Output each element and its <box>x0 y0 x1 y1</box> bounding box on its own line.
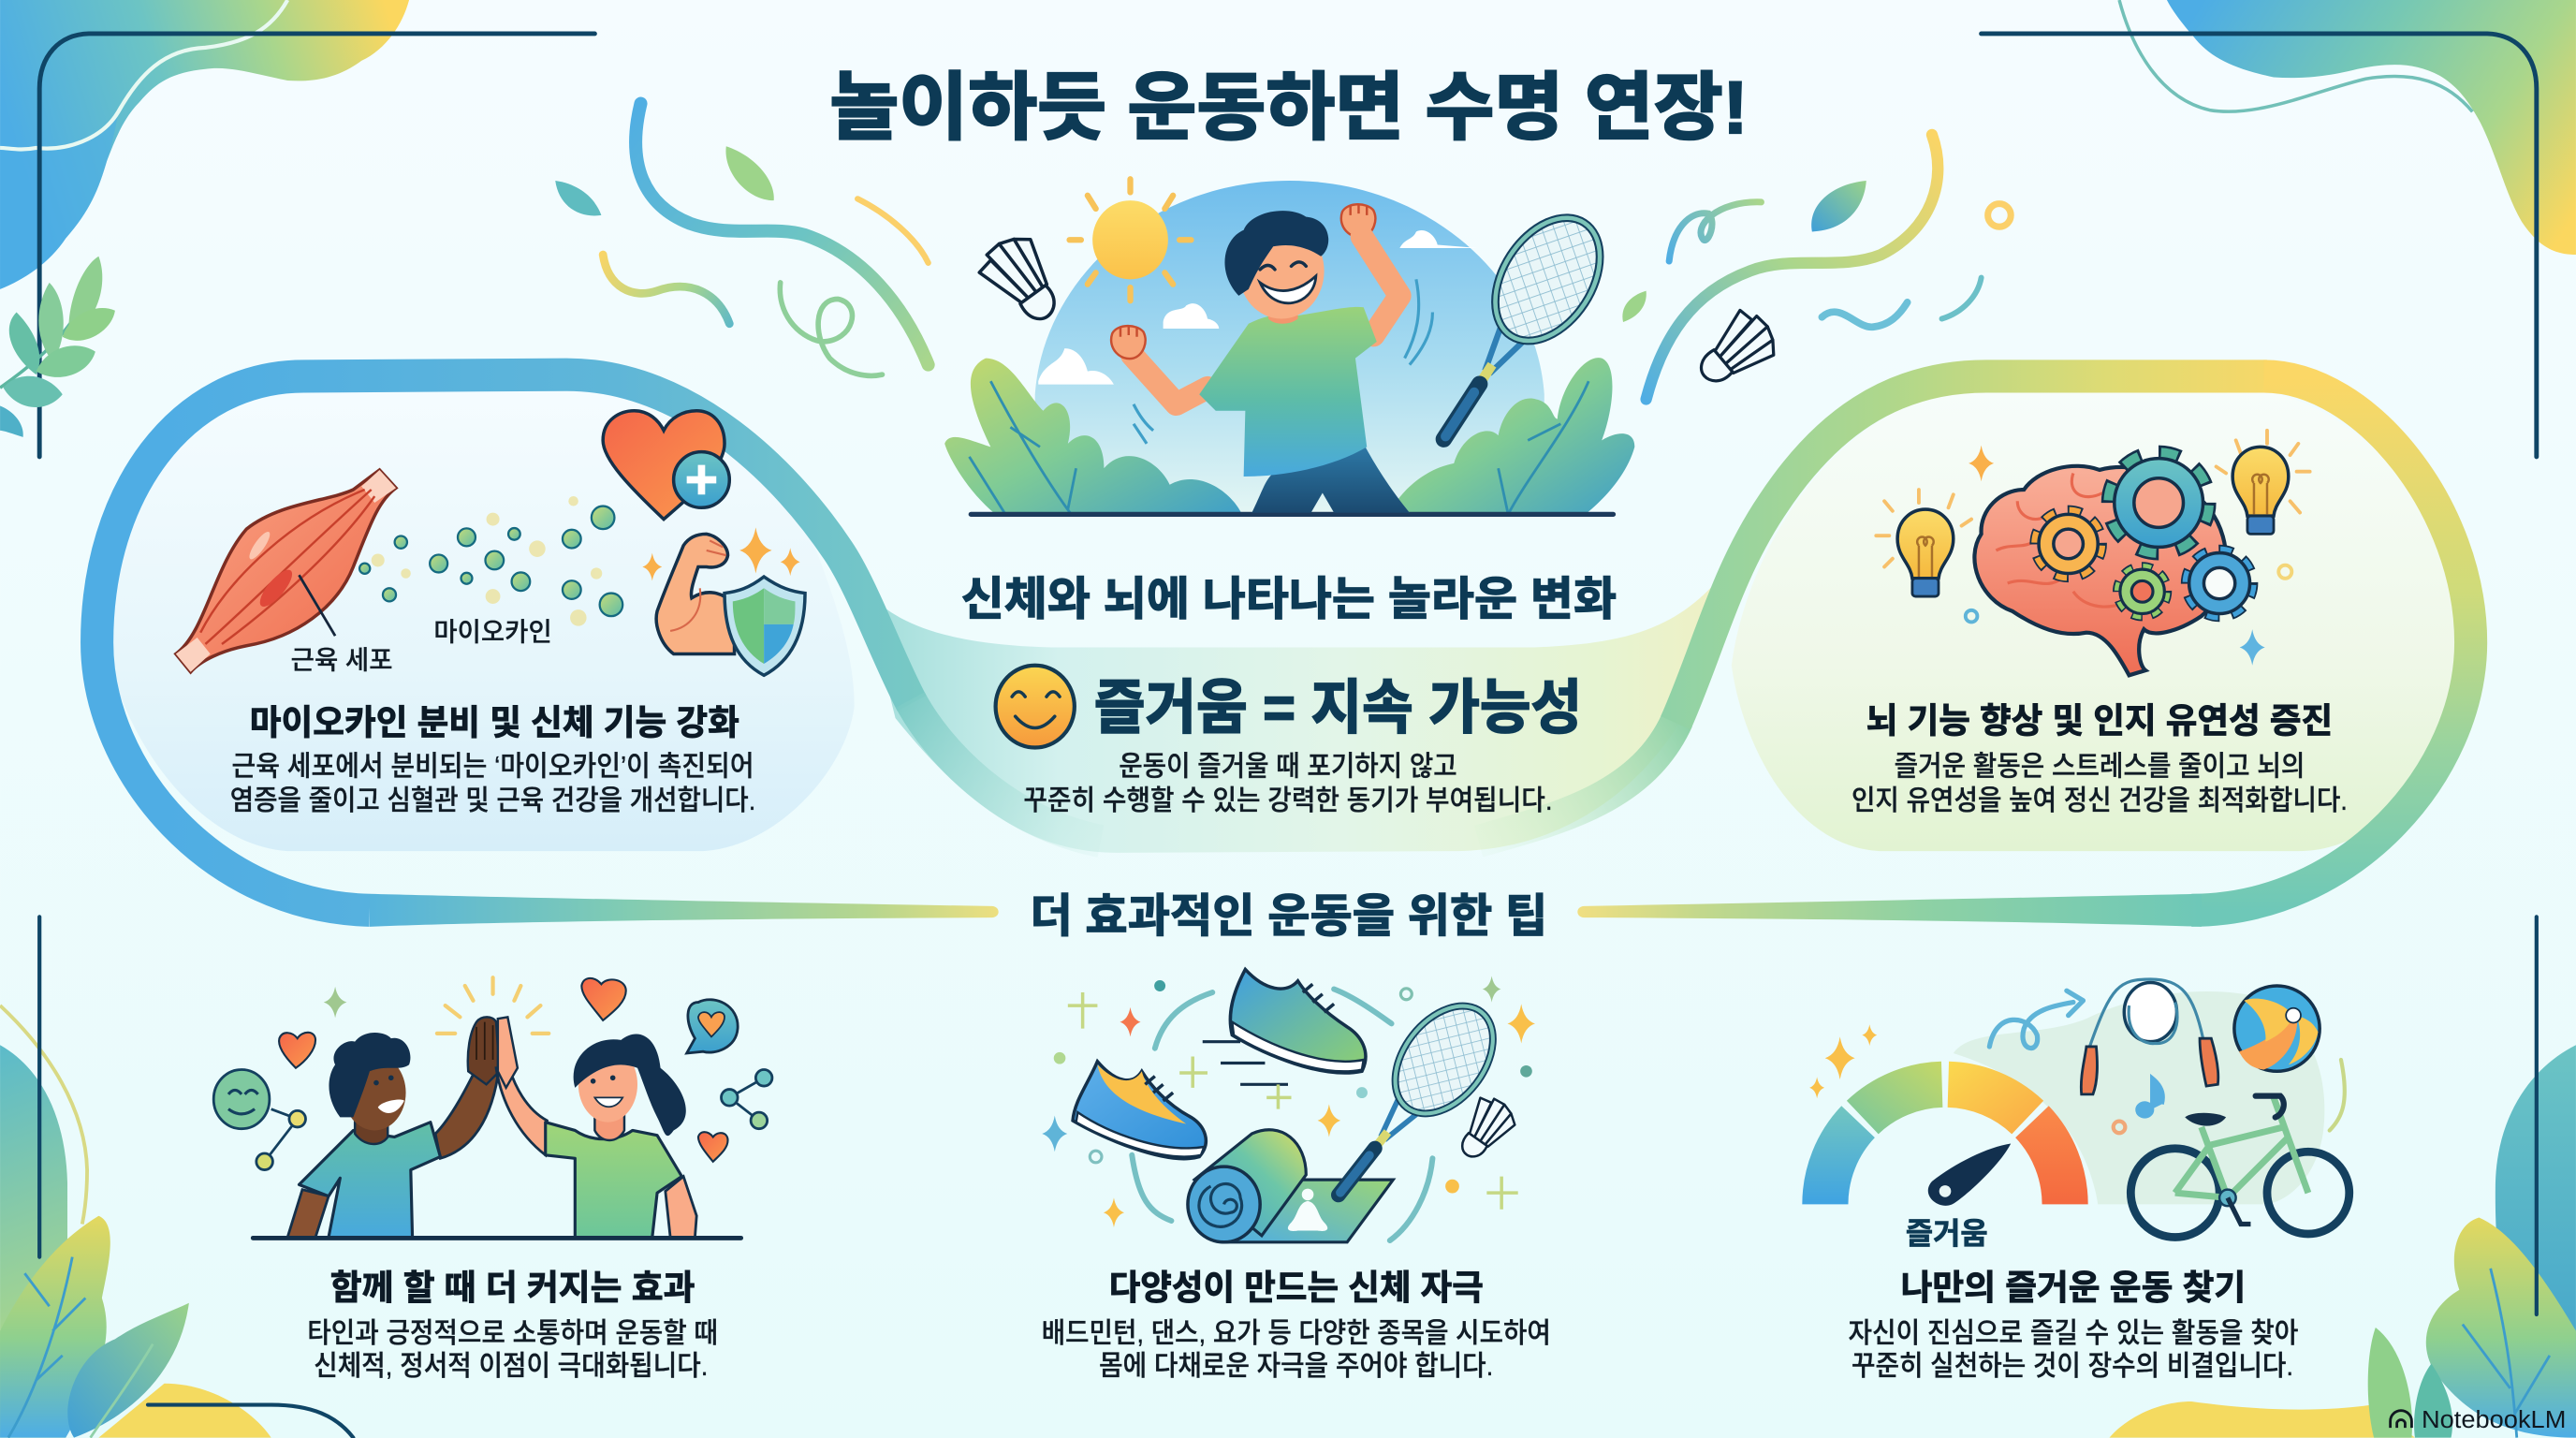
text: tip one: 타인과 긍정적으로 소통하며 운동할 때 <box>307 1318 718 1349</box>
sparkles small <box>1809 1024 2125 1133</box>
icon: racket small <box>1307 988 1513 1220</box>
bush right <box>1388 358 1634 514</box>
bottom-left corner decoration <box>0 917 353 1438</box>
person <box>1111 204 1432 513</box>
text: tip three: 나만의 즐거운 운동 찾기 <box>1901 1269 2246 1307</box>
illustration: high five <box>213 977 772 1238</box>
icon: bulb left <box>1897 509 1954 596</box>
heading: changes: 신체와 뇌에 나타나는 놀라운 변화 <box>961 574 1617 624</box>
gauge <box>1802 1062 2088 1206</box>
label: myokine: 마이오카인 <box>433 617 552 646</box>
top-right corner decoration <box>1982 0 2576 457</box>
text: tip two <box>1042 1269 1551 1382</box>
jump rope <box>2081 979 2218 1094</box>
illustration: gauge and gear <box>1802 979 2349 1251</box>
icon: shield <box>724 577 805 675</box>
top-left corner decoration <box>0 0 594 457</box>
text: right panel heading: 뇌 기능 향상 및 인지 유연성 증진 <box>1866 702 2333 741</box>
icon: leaf small <box>555 181 601 215</box>
icon: bicycle <box>2130 1096 2349 1238</box>
gear large <box>2110 453 2208 552</box>
illustration: shoes, racket, mat <box>1042 969 1535 1242</box>
icon: smiley <box>213 1070 270 1129</box>
icon: racket <box>1407 198 1621 463</box>
text: right panel description <box>1852 751 2348 816</box>
bush left <box>944 359 1242 514</box>
gear orange <box>2036 511 2101 577</box>
ribbon right <box>1479 376 2471 927</box>
frame corner top-right <box>1982 34 2537 457</box>
bottom-right corner decoration <box>2110 917 2576 1438</box>
hero illustration <box>944 179 1634 514</box>
network nodes <box>256 1070 772 1170</box>
icon: smile <box>996 666 1075 748</box>
frame line bottom-right <box>2536 917 2538 1314</box>
text: center description <box>1023 751 1553 816</box>
panel: muscle left fill <box>104 386 855 851</box>
text: right panel description: 즐거운 활동은 스트레스를 줄이고 뇌의 <box>1895 751 2305 782</box>
gear blue <box>2187 550 2252 616</box>
gear green <box>2117 566 2167 616</box>
panel: center fill (joy) <box>862 574 1723 853</box>
icon: shuttlecock small <box>1449 1091 1521 1167</box>
swirl arrow <box>1989 990 2083 1048</box>
ribbon left <box>97 374 1101 927</box>
hearts <box>279 978 728 1162</box>
frame corner top-left <box>39 34 594 457</box>
needle <box>1928 1143 2011 1206</box>
decorative swooshes right <box>1622 135 2011 399</box>
shoe left <box>1073 1062 1206 1159</box>
speed lines <box>1203 1042 1288 1084</box>
decorative swooshes left <box>555 104 929 375</box>
title: 놀이하듯 운동하면 수명 연장! <box>829 66 1748 149</box>
backdrop <box>1954 991 2324 1204</box>
text: left panel heading: 마이오카인 분비 및 신체 기능 강화 <box>250 703 739 741</box>
text: tip two: 몸에 다채로운 자극을 주어야 합니다. <box>1099 1351 1493 1382</box>
text: left panel description <box>230 751 755 816</box>
ground line <box>971 513 1613 516</box>
text: tip one <box>307 1269 718 1382</box>
text: center description: 운동이 즐거울 때 포기하지 않고 <box>1119 751 1457 782</box>
heading: tips: 더 효과적인 운동을 위한 팁 <box>1030 891 1547 942</box>
icon: sun <box>1070 179 1191 301</box>
icon: flexed arm <box>642 527 800 654</box>
icon: ring <box>1988 204 2011 227</box>
clouds <box>1038 230 1479 385</box>
shoe top <box>1230 969 1366 1073</box>
text: center description: 꾸준히 수행할 수 있는 강력한 동기가 부여됩니다. <box>1023 785 1553 816</box>
text: tip two: 배드민턴, 댄스, 요가 등 다양한 종목을 시도하여 <box>1042 1318 1551 1349</box>
text: left panel description: 염증을 줄이고 심혈관 및 근육 건강을 개선합니다. <box>230 785 755 816</box>
frame corner bottom-left <box>39 917 353 1438</box>
icon: bulb right <box>2232 447 2289 534</box>
sparkles <box>1825 1036 1855 1079</box>
label: muscle cell: 근육 세포 <box>291 645 393 674</box>
text: tip three <box>1848 1269 2298 1382</box>
text: tip three: 자신이 진심으로 즐길 수 있는 활동을 찾아 <box>1848 1318 2298 1349</box>
heading: joy equals sustainability: 즐거움 = 지속 가능성 <box>1094 675 1582 741</box>
icon: brain with gears <box>1876 431 2310 675</box>
icon: leaf <box>725 146 774 200</box>
mat <box>1188 1130 1393 1242</box>
label: joy: 즐거움 <box>1906 1217 1988 1251</box>
panel: brain right fill <box>1732 386 2460 851</box>
icon: heart plus <box>603 411 729 520</box>
myokine dots <box>359 496 622 626</box>
rays <box>437 977 549 1034</box>
icon: branch left <box>0 257 115 437</box>
woman <box>496 1017 696 1238</box>
sky arch <box>1035 181 1544 514</box>
icon: shuttlecock left <box>973 227 1073 333</box>
icon: shuttlecock right <box>1687 303 1784 398</box>
icon: leaf right <box>1811 181 1866 231</box>
text: left panel description: 근육 세포에서 분비되는 ‘마이오카인’이 촉진되어 <box>232 751 754 782</box>
text: tip two: 다양성이 만드는 신체 자극 <box>1109 1269 1484 1307</box>
man <box>287 1017 500 1238</box>
text: tip one: 함께 할 때 더 커지는 효과 <box>330 1269 695 1307</box>
sparkles and arcs <box>1042 976 1535 1240</box>
notebooklm watermark: NotebookLM <box>2422 1405 2566 1433</box>
text: tip one: 신체적, 정서적 이점이 극대화됩니다. <box>314 1351 708 1382</box>
ground line <box>253 1237 741 1240</box>
text: right panel description: 인지 유연성을 높여 정신 건강을 최적화합니다. <box>1852 785 2348 816</box>
ribbon tail left <box>370 894 999 927</box>
text: tip three: 꾸준히 실천하는 것이 장수의 비결입니다. <box>1852 1351 2293 1382</box>
icon: muscle <box>176 470 396 672</box>
ribbon tail right <box>1577 894 2202 927</box>
icon: beach ball <box>2234 986 2320 1071</box>
icon: music note <box>2137 1078 2163 1116</box>
speech bubble <box>687 1000 738 1053</box>
